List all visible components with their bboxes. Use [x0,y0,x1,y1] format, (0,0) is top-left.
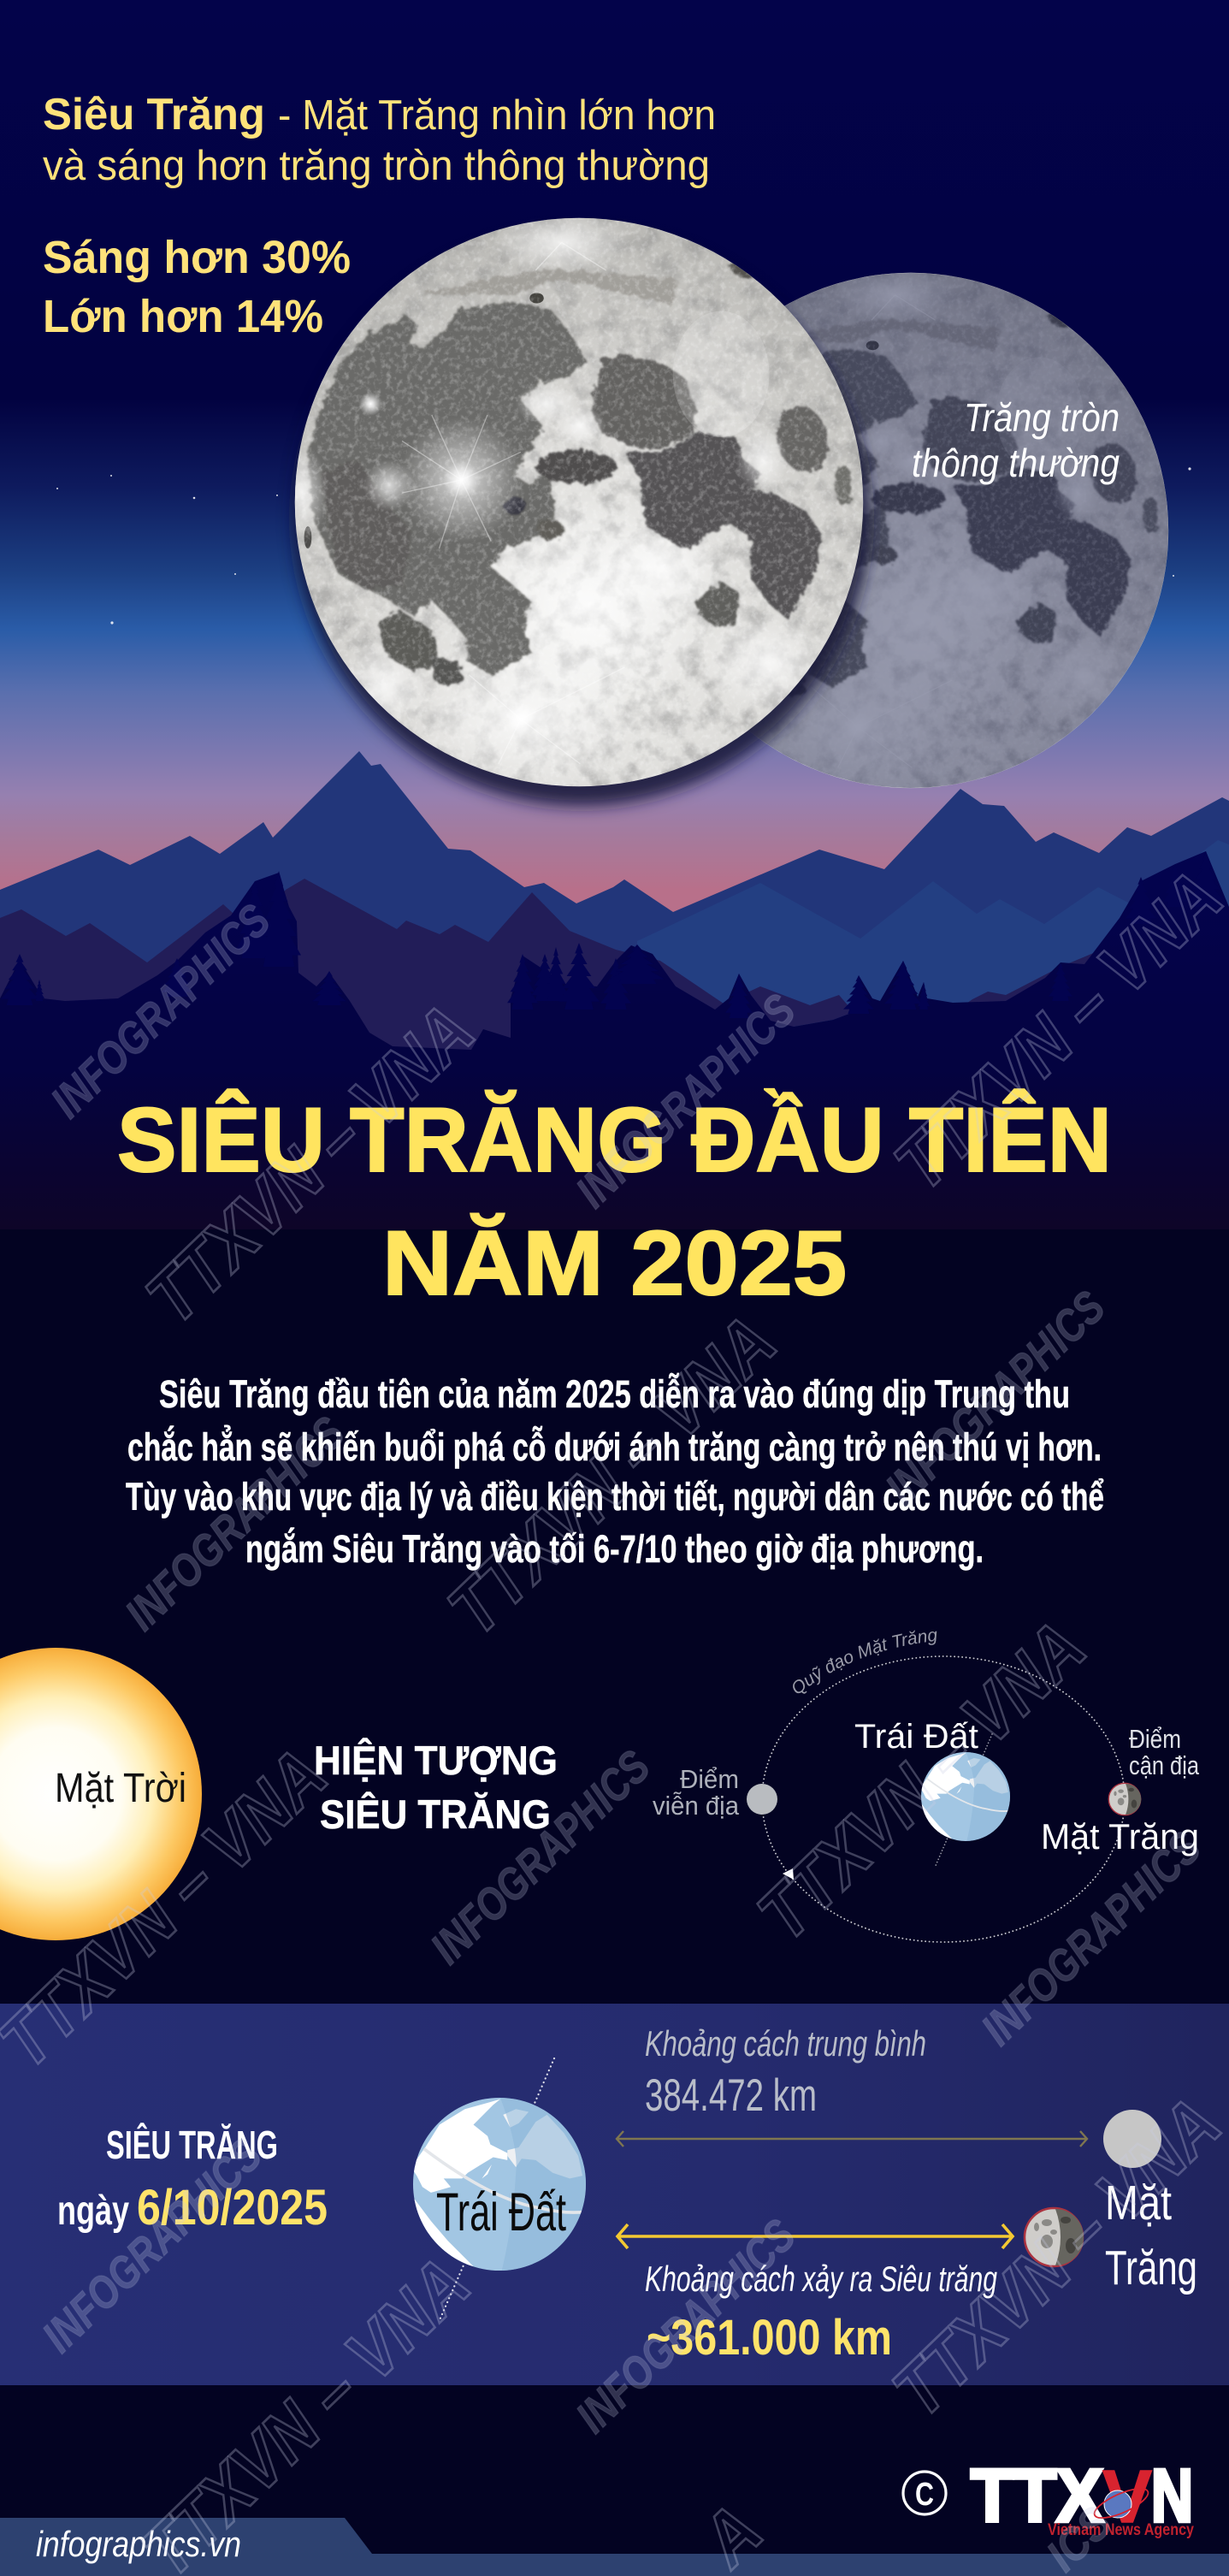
label: moon [1105,2176,1197,2295]
heading: supermoon phenomenon [314,1738,558,1837]
logo: TTXVN: V [1102,2455,1152,2538]
logo: TTXVN: TTX [971,2455,1103,2538]
caption: regular full moon: thông thường [912,441,1120,485]
watermarks: INFOGRAPHICS [41,895,281,1128]
key stats: brighter and bigger [43,232,351,342]
watermarks: TTXVN – VNA [433,1300,791,1650]
label: perigee: cận địa [1129,1750,1200,1780]
intro paragraph [126,1372,1104,1571]
label: moon: Trăng [1105,2241,1197,2295]
orbit label: Quỹ đạo Mặt Trăng [793,1631,937,1694]
logo: TTXVN [971,2455,1194,2539]
watermarks: TTXVN – VNA [131,989,489,1339]
title: SIÊU TRĂNG ĐẦU TIÊN [117,1088,1112,1191]
big moon: supermoon with shadow [276,211,872,806]
stars [56,467,1191,625]
moon orbit [762,1656,1125,1942]
orbit diagram [653,1631,1200,1943]
perigee moon [1108,1783,1141,1815]
watermarks: INFOGRAPHICS [876,1282,1115,1514]
label: apogee: viễn địa [653,1791,740,1821]
label: earth: Trái Đất [436,2182,566,2242]
website label: infographics.vn [36,2524,241,2564]
label: apogee [653,1764,740,1821]
date label [57,2123,328,2235]
label: perigee: Điểm [1129,1724,1181,1754]
caption: regular full moon [912,395,1120,485]
average distance: 384.472 km [645,2070,817,2121]
intro paragraph: ngắm Siêu Trăng vào tối 6-7/10 theo giờ địa phương. [245,1527,984,1571]
watermarks: INFOGRAPHICS [115,1407,355,1640]
watermarks: INFOGRAPHICS [566,985,806,1217]
logo: TTXVN: N [1151,2455,1193,2538]
perigee moon [1025,2208,1084,2266]
supermoon distance: ~361.000 km [647,2310,892,2366]
label: apogee: Điểm [680,1764,739,1794]
small earth [920,1752,1013,1841]
average moon [1103,2110,1161,2168]
key stats: brighter and bigger: Sáng hơn 30% [43,232,351,283]
background: night sky gradient [0,0,1229,1229]
footer bar [0,2518,1229,2576]
copyright icon [903,2472,946,2514]
background: lower dark panel [0,1229,1229,2576]
heading: supermoon phenomenon: SIÊU TRĂNG [320,1791,551,1837]
sun with label [0,1648,202,1940]
logo: TTXVN: Vietnam News Agency [1048,2521,1194,2539]
watermarks: INFOGRAPHICS [32,2129,272,2362]
label: moon: Mặt Trăng [1041,1816,1199,1856]
title [117,1088,1112,1314]
watermarks: INFOGRAPHICS [566,2210,806,2443]
average distance [645,2023,926,2121]
intro text: supermoon definition: - Mặt Trăng nhìn lớn hơn [278,92,716,139]
title: NĂM 2025 [382,1211,847,1314]
intro text: supermoon definition [43,90,716,189]
intro text: supermoon definition: Siêu Trăng [43,90,265,139]
supermoon distance [645,2259,997,2366]
date label: 6/10/2025 [137,2180,328,2235]
small moon: regular full moon [636,266,1177,797]
panel: distances on 6/10/2025 [0,2004,1229,2385]
date label: SIÊU TRĂNG [106,2123,278,2167]
supermoon distance: Khoảng cách xảy ra Siêu trăng [645,2259,997,2299]
orbit direction arrow [783,1868,794,1880]
label: earth: Trái Đất [854,1718,978,1756]
apogee moon [747,1784,777,1815]
intro text: supermoon definition: và sáng hơn trăng tròn thông thường [43,143,710,189]
average distance: Khoảng cách trung bình [645,2023,926,2064]
mountains and forest [0,751,1229,1229]
arrow: supermoon distance [617,2224,1013,2248]
arrow: average distance [617,2131,1087,2147]
watermarks: TTXVN – VNA [742,1606,1101,1956]
watermarks: INFOGRAPHICS [421,1741,660,1974]
heading: supermoon phenomenon: HIỆN TƯỢNG [314,1738,558,1783]
earth axis [935,1734,992,1868]
label: perigee [1129,1724,1200,1780]
date label: ngày [57,2188,129,2234]
label: moon: Mặt [1105,2176,1172,2230]
caption: regular full moon: Trăng tròn [964,395,1120,440]
key stats: brighter and bigger: Lớn hơn 14% [43,291,323,342]
earth globe [411,2098,593,2271]
copyright icon: C [915,2477,934,2513]
earth axis [439,2058,554,2322]
sun with label: Mặt Trời [55,1766,186,1811]
watermarks [0,856,1229,2576]
